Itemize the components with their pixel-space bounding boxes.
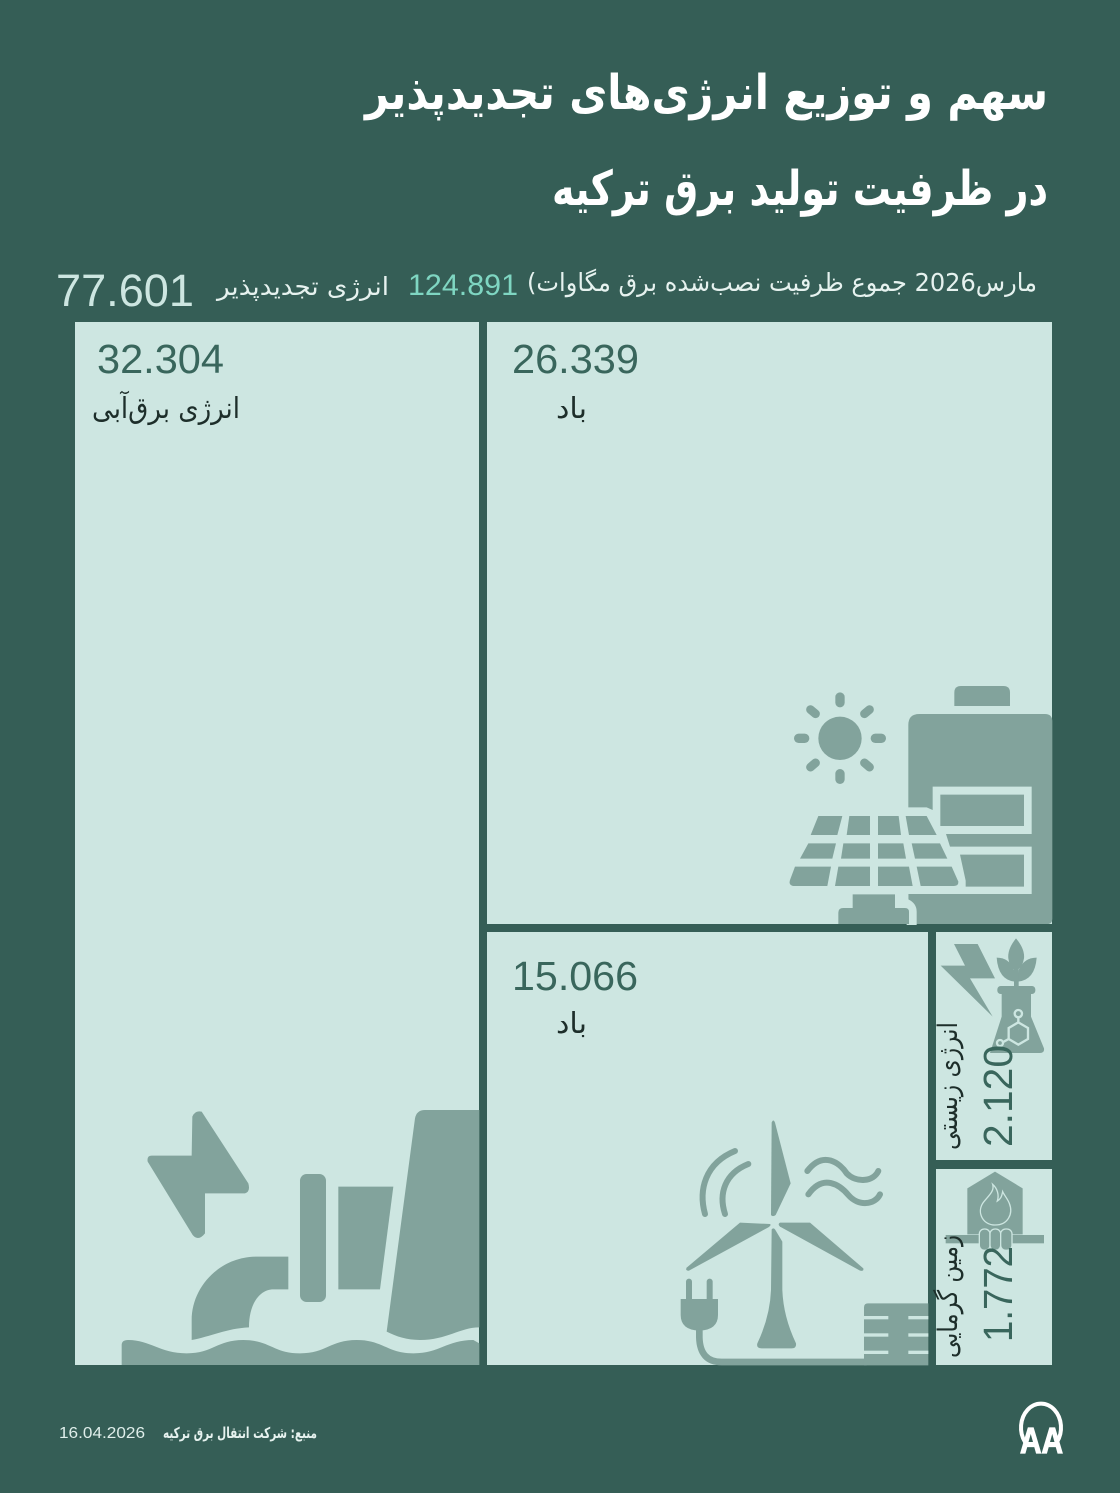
renewable label: انرژی تجدیدپذیر [215, 272, 389, 301]
geothermal value: 1.772 [975, 1246, 1021, 1342]
biomass value: 2.120 [975, 1045, 1021, 1147]
title [363, 65, 1048, 217]
source: منبع: شرکت انتقال برق ترکیه [163, 1424, 317, 1442]
solar background [487, 322, 1052, 924]
hydro value: 32.304 [97, 336, 224, 382]
total capacity value: 124.891 [408, 269, 518, 302]
wind background [487, 932, 928, 1365]
date: 16.04.2026 [59, 1425, 145, 1442]
biomass label: انرژی زیستی [933, 1022, 964, 1150]
icon: sun, battery and solar panel [790, 686, 1052, 925]
logo: AA [1020, 1404, 1063, 1461]
panel: solar [487, 322, 1052, 925]
solar label: باد [556, 391, 587, 425]
footer [59, 1404, 1063, 1461]
panel: wind [487, 932, 928, 1365]
total capacity label: مارس2026 جموع ظرفیت نصب‌شده برق مگاوات) [527, 268, 1037, 298]
panel: geothermal [932, 1169, 1052, 1365]
panel: hydro [75, 322, 479, 1365]
icon: wind turbine and plug [681, 1120, 928, 1365]
geothermal label: زمین گرمایی [932, 1235, 964, 1358]
biomass background [936, 932, 1052, 1160]
wind label: باد [556, 1006, 587, 1040]
icon: bolt and flask with plant [941, 938, 1044, 1053]
logo: AA: AA [1020, 1420, 1063, 1461]
hydro label: انرژی برق‌آبی [92, 390, 240, 425]
geothermal background [936, 1169, 1052, 1365]
solar value: 26.339 [512, 336, 639, 382]
summary row [56, 265, 1037, 316]
icon: hydro dam [122, 1110, 479, 1365]
renewable value: 77.601 [56, 265, 194, 316]
icon: house with flame and pipe [946, 1172, 1044, 1250]
panel: biomass [933, 932, 1052, 1160]
wind value: 15.066 [512, 953, 638, 999]
hydro background [75, 322, 479, 1365]
